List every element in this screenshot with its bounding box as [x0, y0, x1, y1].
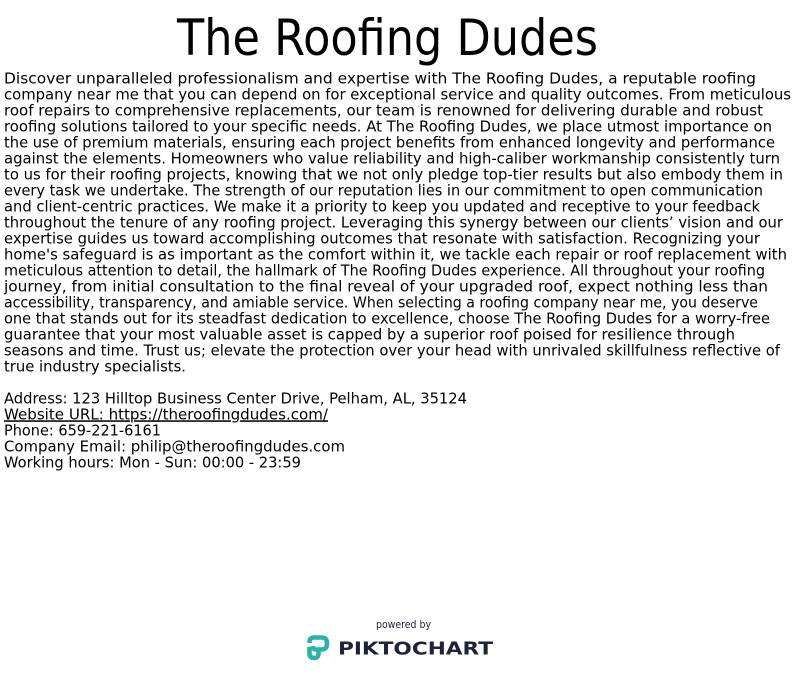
text block: company description: and client-centric practices. We make it a priority to keep you updated and receptive to your feedback — [4, 197, 760, 215]
text block: company description: every task we undertake. The strength of our reputation lies in our commitment to open communication — [4, 181, 763, 199]
text block: contact details — [4, 389, 467, 471]
text block: company description: true industry specialists. — [4, 357, 186, 375]
text block: company description: journey, from initial consultation to the final reveal of your upgraded roof, expect nothing less than — [3, 277, 768, 295]
text block: contact details: Phone: 659-221-6161 — [4, 421, 161, 439]
footer: powered by Piktochart — [310, 619, 494, 660]
text block: company description: expertise guides us toward accomplishing outcomes that resonate with satisfaction. Recognizing your — [4, 229, 761, 247]
text block: company description: roof repairs to comprehensive replacements, our team is renowned for delivering durable and robust — [4, 101, 763, 119]
text block: company description: meticulous attention to detail, the hallmark of The Roofing Dudes experience. All throughout your roofing — [4, 261, 765, 279]
text block: company description: against the elements. Homeowners who value reliability and high-caliber workmanship consistently turn — [4, 149, 780, 167]
text block: company description: guarantee that your most valuable asset is capped by a superior roof poised for resilience through — [4, 325, 735, 343]
text block: company description: to us for their roofing projects, knowing that we not only pledge top-tier results but also embody them in — [4, 165, 783, 183]
text block: contact details: Address: 123 Hilltop Business Center Drive, Pelham, AL, 35124 — [4, 389, 467, 407]
text block: company description: Discover unparalleled professionalism and expertise with The Roofing Dudes, a reputable roofing — [4, 69, 756, 87]
text block: company description: roofing solutions tailored to your specific needs. At The Roofing Dudes, we place utmost importance on — [4, 117, 772, 135]
icon: Piktochart logo — [310, 638, 327, 658]
text block: company description: one that stands out for its steadfast dedication to excellence, choose The Roofing Dudes for a worry-free — [4, 309, 770, 327]
text block: company description: seasons and time. Trust us; elevate the protection over your head with unrivaled skillfulness reflective of — [4, 341, 781, 359]
text block: company description: home's safeguard is as important as the comfort within it, we tackle each repair or roof replacement with — [4, 245, 787, 263]
text block: contact details: Working hours: Mon - Sun: 00:00 - 23:59 — [4, 453, 301, 471]
text block: contact details: Company Email: philip@theroofingdudes.com — [4, 437, 345, 455]
text block: company description: accessibility, transparency, and amiable service. When selecting a roofing company near me, you deserve — [4, 293, 758, 311]
text block: company description: the use of premium materials, ensuring each project benefits from enhanced longevity and performance — [4, 133, 775, 151]
text block: company description: throughout the tenure of any roofing project. Leveraging this synergy between our clients’ vision and our — [4, 213, 784, 231]
title: The Roofing Dudes — [176, 9, 598, 67]
text block: company description: company near me that you can depend on for exceptional service and quality outcomes. From meticulous — [4, 85, 791, 103]
powered by label: powered by — [376, 619, 431, 631]
text block: company description — [3, 69, 791, 375]
wordmark: PIKTOCHART — [338, 638, 494, 660]
text block: contact details: Website URL: https://theroofingdudes.com/ — [4, 405, 329, 423]
